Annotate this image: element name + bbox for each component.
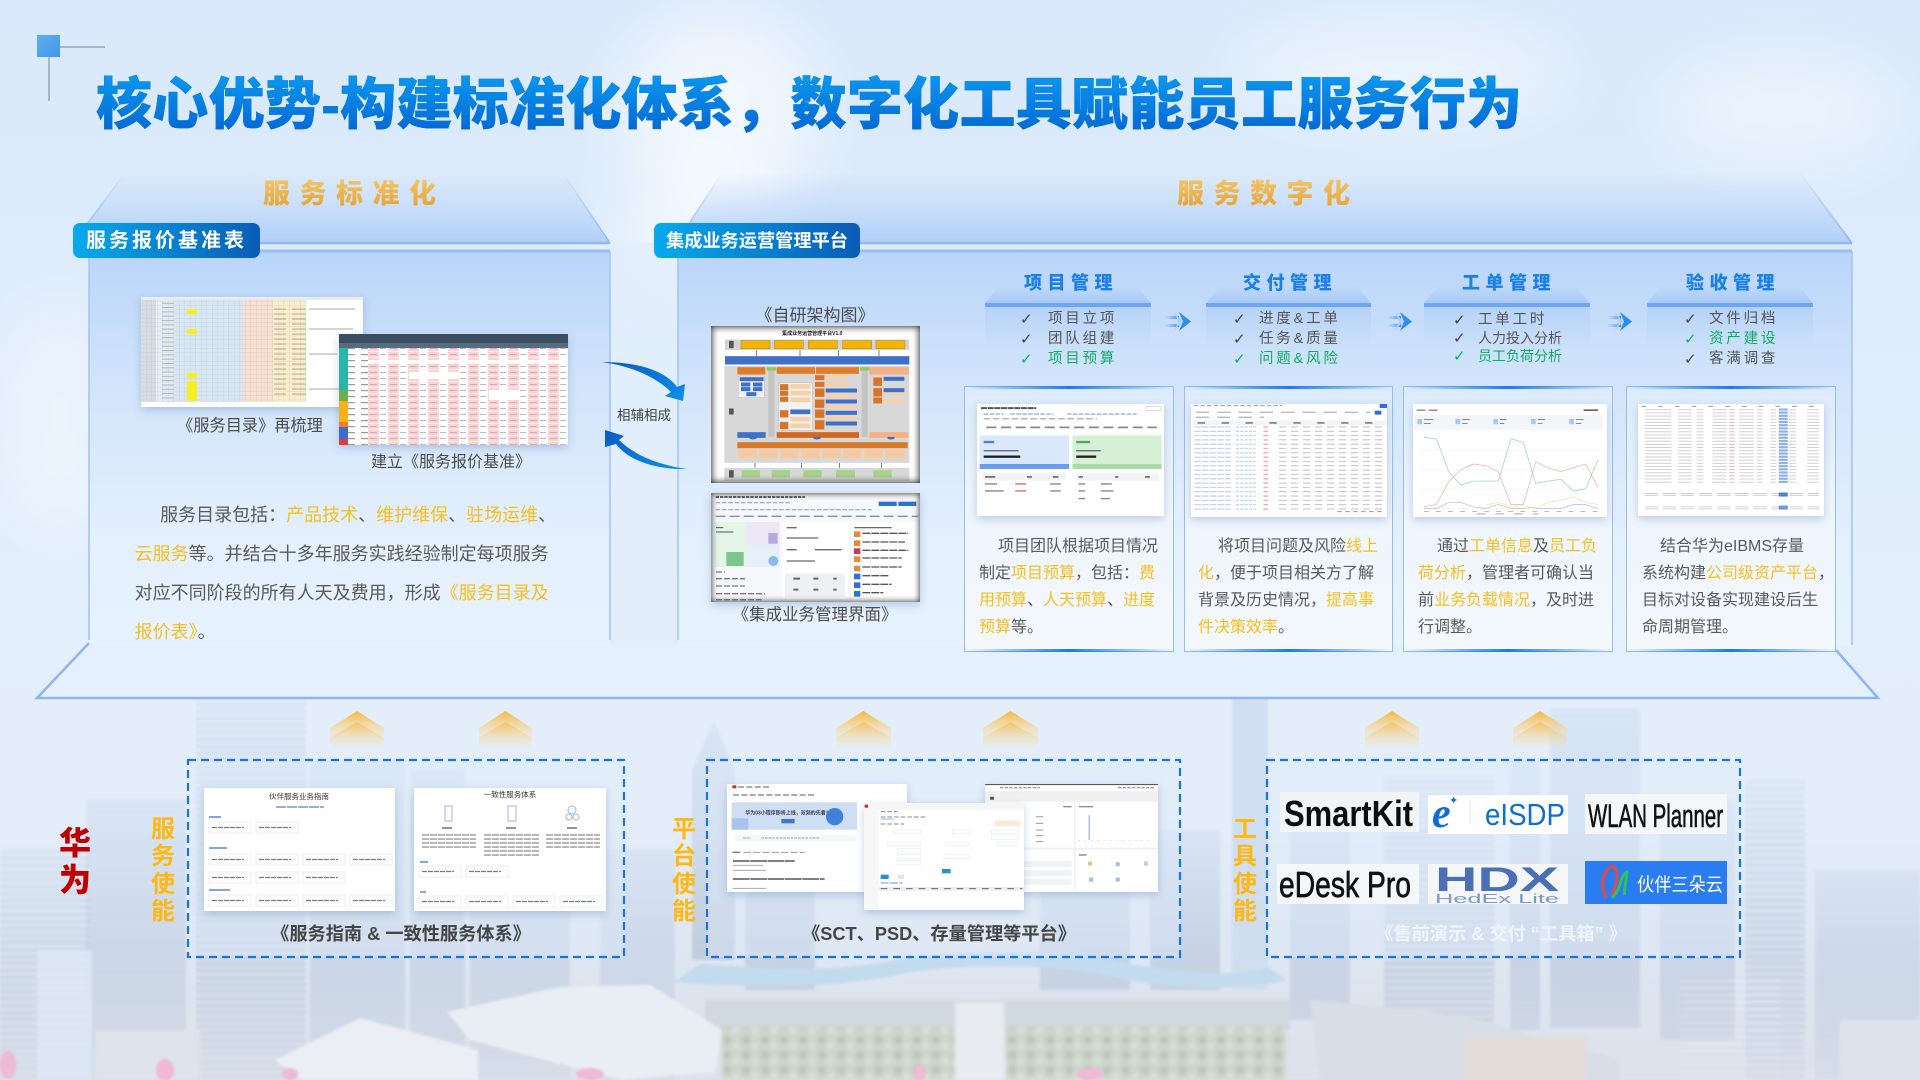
- list: project management: 团队组建: [1048, 331, 1117, 347]
- list: acceptance management: [1684, 310, 1778, 368]
- image: architecture diagram: 集成业务运营管理平台V1.0: [782, 330, 843, 337]
- tab: integration operations platform: 集成业务运营管理平台: [666, 231, 848, 251]
- logo: partner cloud: 伙伴三朵云: [1637, 870, 1723, 897]
- text: service catalogue description: 云服务等。并结合十多年服务实践经验制定每项服务: [135, 544, 549, 564]
- list: project management: [1020, 310, 1117, 368]
- logo: eISDP: eISDP: [1485, 797, 1565, 832]
- left roof: [73, 173, 610, 243]
- list: delivery management: ✓: [1233, 350, 1246, 368]
- logo: eISDP: [1428, 791, 1568, 837]
- label: mutually complementary: 相辅相成: [617, 408, 671, 423]
- text: asset platform description: 命周期管理。: [1642, 619, 1738, 636]
- image: SCT portal: 华为03小程序即将上线，双频的先看！: [745, 810, 831, 817]
- list: work order management: 工单工时: [1478, 312, 1547, 328]
- caption: integrated business management interface: 《集成业务管理界面》: [732, 606, 898, 624]
- image: PSD form: [864, 803, 1024, 910]
- list: work order management: ✓: [1453, 329, 1466, 347]
- text: work order description: [1418, 537, 1597, 636]
- logo: WLAN Planner: [1585, 794, 1727, 834]
- label: platform enablement: 平台使能: [672, 816, 696, 925]
- list: work order management: 员工负荷分析: [1478, 348, 1562, 364]
- text: issue and risk description: 件决策效率。: [1198, 619, 1294, 636]
- text: service catalogue description: 服务目录包括：产品技术、维护维保、驻场运维、: [160, 505, 556, 525]
- list: delivery management: ✓: [1233, 310, 1246, 328]
- text: project budget description: 制定项目预算，包括：费: [979, 565, 1155, 582]
- list: acceptance management: ✓: [1684, 310, 1697, 328]
- list: project management: ✓: [1020, 350, 1033, 368]
- text: project budget description: 项目团队根据项目情况: [998, 538, 1158, 555]
- process arrows: [1164, 312, 1632, 331]
- text: service catalogue description: 报价表》。: [135, 622, 216, 642]
- logo: HedEx Lite: HedEx Lite: [1435, 891, 1559, 906]
- text: issue and risk description: 将项目问题及风险线上: [1218, 538, 1378, 555]
- image: platform dashboard: [985, 784, 1158, 892]
- text: project budget description: 用预算、人天预算、进度: [979, 592, 1155, 609]
- card: acceptance management: [1626, 386, 1836, 652]
- upward chevrons: [330, 711, 1567, 748]
- image: service price baseline table: [339, 334, 568, 445]
- list: delivery management: [1233, 310, 1341, 368]
- screenshot: asset table: [1638, 404, 1824, 516]
- list: acceptance management: 资产建设: [1709, 331, 1778, 347]
- label: service enablement: 服务使能: [151, 816, 175, 925]
- list: acceptance management: 客满调查: [1709, 351, 1778, 367]
- text: work order description: 行调整。: [1418, 619, 1482, 636]
- text: project budget description: [979, 537, 1158, 636]
- text: work order description: 通过工单信息及员工负: [1437, 538, 1597, 555]
- caption: platforms: 《SCT、PSD、存量管理等平台》: [802, 924, 1076, 944]
- text: issue and risk description: 化，便于项目相关方了解: [1198, 565, 1374, 582]
- list: delivery management: 问题&风险: [1259, 351, 1341, 367]
- text: asset platform description: 结合华为eIBMS存量: [1660, 538, 1804, 555]
- list: delivery management: 任务&质量: [1259, 331, 1341, 347]
- logo: eDesk Pro: eDesk Pro: [1279, 864, 1411, 905]
- image: consistent service system: [414, 788, 606, 911]
- arrow: mutual support bottom: [605, 430, 687, 469]
- logo: SmartKit: SmartKit: [1284, 793, 1413, 834]
- image: consistent service system: 一致性服务体系: [484, 789, 537, 799]
- list: work order management: [1453, 311, 1562, 365]
- text: work order description: 荷分析，管理者可确认当: [1418, 565, 1594, 582]
- list: acceptance management: 文件归档: [1709, 311, 1778, 327]
- logo: eISDP: e: [1432, 791, 1451, 837]
- image: integrated business management interface: [711, 493, 920, 602]
- title: 核心优势-构建标准化体系，数字化工具赋能员工服务行为: [96, 73, 1522, 136]
- card: work order management: [1403, 386, 1613, 652]
- caption: architecture diagram: 《自研架构图》: [756, 306, 874, 324]
- text: service catalogue description: [135, 505, 556, 642]
- logo: HedEx Lite: [1428, 861, 1568, 906]
- tab: service price baseline: 服务报价基准表: [86, 230, 247, 252]
- list: acceptance management: ✓: [1684, 330, 1697, 348]
- heading: acceptance management: 验收管理: [1686, 273, 1780, 293]
- screenshot: issue and risk table: [1191, 404, 1387, 517]
- management box shapes: [985, 285, 1813, 372]
- chart: workload line chart: [1413, 404, 1607, 517]
- card: delivery management: [1184, 386, 1393, 652]
- label: tool enablement: 工具使能: [1233, 816, 1257, 925]
- logo: HedEx Lite: HDX: [1435, 861, 1560, 899]
- list: acceptance management: ✓: [1684, 350, 1697, 368]
- dashed boxes: [188, 760, 1740, 957]
- heading: project management: 项目管理: [1024, 273, 1118, 293]
- list: delivery management: 进度&工单: [1259, 311, 1341, 327]
- list: work order management: ✓: [1453, 347, 1466, 365]
- image: partner service guide: [204, 788, 395, 911]
- arrow: mutual support top: [602, 362, 685, 401]
- logo: WLAN Planner: WLAN Planner: [1588, 798, 1723, 834]
- image: service catalogue table: [141, 297, 363, 407]
- list: work order management: ✓: [1453, 311, 1466, 329]
- heading: service standardisation: 服务标准化: [263, 179, 446, 209]
- screenshot: project budget: [977, 404, 1164, 516]
- text: asset platform description: 系统构建公司级资产平台，: [1642, 565, 1834, 582]
- card: project management: [964, 386, 1174, 652]
- text: asset platform description: 目标对设备实现建设后生: [1642, 592, 1818, 609]
- list: project management: 项目预算: [1048, 351, 1117, 367]
- image: SCT portal: [727, 784, 907, 892]
- list: delivery management: ✓: [1233, 330, 1246, 348]
- tab: service price baseline: [73, 223, 260, 258]
- list: project management: 项目立项: [1048, 311, 1117, 327]
- tab: integration operations platform: [654, 223, 860, 258]
- text: issue and risk description: 背景及历史情况，提高事: [1198, 592, 1374, 609]
- text: issue and risk description: [1198, 537, 1378, 636]
- image: partner service guide: 伙伴服务业务指南: [269, 791, 329, 801]
- list: project management: ✓: [1020, 330, 1033, 348]
- text: asset platform description: [1642, 537, 1834, 636]
- text: project budget description: 预算等。: [979, 619, 1043, 636]
- title decoration: [37, 35, 105, 101]
- list: work order management: 人力投入分析: [1478, 330, 1562, 346]
- label: Huawei: 华为: [59, 825, 91, 898]
- logo: partner cloud: [1585, 861, 1727, 904]
- heading: service digitalisation: 服务数字化: [1177, 179, 1360, 209]
- caption: service price baseline: 建立《服务报价基准》: [371, 454, 531, 470]
- text: work order description: 前业务负载情况，及时进: [1418, 592, 1594, 609]
- text: service catalogue description: 对应不同阶段的所有人天及费用，形成《服务目录及: [135, 583, 549, 603]
- caption: pre-sales demo and delivery toolbox: 《售前演示 & 交付 “工具箱” 》: [1375, 924, 1627, 944]
- heading: work order management: 工单管理: [1462, 273, 1556, 293]
- caption: service guide: 《服务指南 & 一致性服务体系》: [271, 924, 531, 944]
- heading: delivery management: 交付管理: [1243, 273, 1337, 293]
- caption: service catalogue: 《服务目录》再梳理: [177, 416, 323, 434]
- logo: eISDP: ✦: [1449, 794, 1458, 807]
- image: architecture diagram: [711, 326, 920, 483]
- list: project management: ✓: [1020, 310, 1033, 328]
